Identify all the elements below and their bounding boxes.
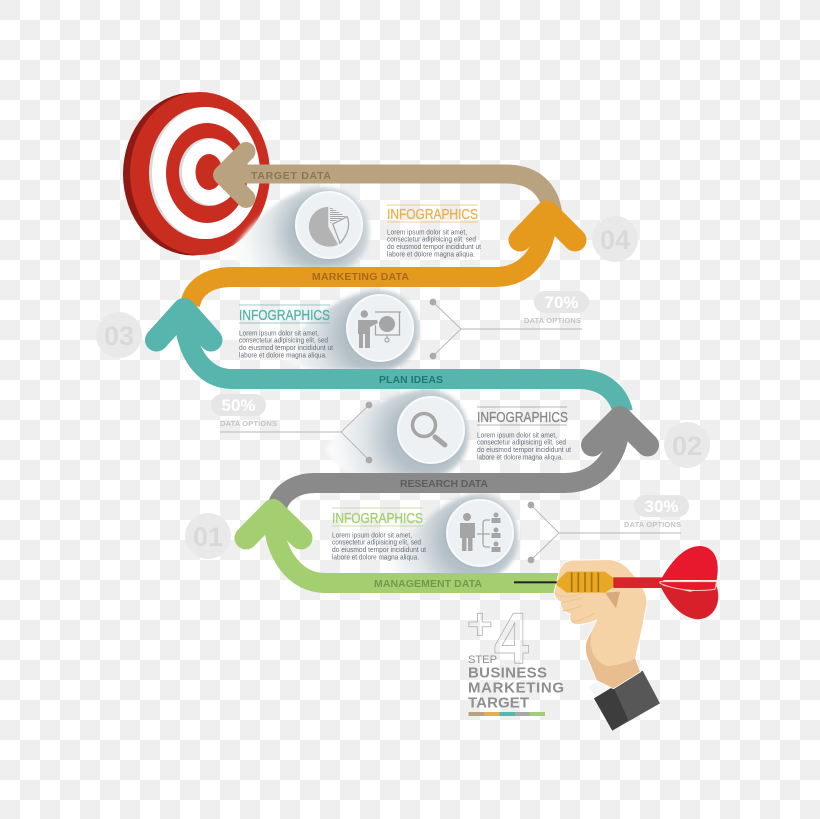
icon: pie chart <box>296 192 362 258</box>
label: marketing data: MARKETING DATA <box>312 271 409 283</box>
text block: orange infographics: consectetur adipisicing elit, sed <box>387 235 476 244</box>
label: target data: TARGET DATA <box>251 170 331 182</box>
hand <box>555 560 647 688</box>
text block: teal infographics: Lorem ipsum dolor sit amet, <box>239 328 319 338</box>
text block: gray infographics: labore et dolore magna aliqua. <box>477 452 563 462</box>
text block: teal infographics: consectetur adipisicing elit, sed <box>239 336 328 345</box>
title text: MARKETING <box>468 680 564 696</box>
shadow: magnifier circle <box>326 389 468 476</box>
plus four numeral: + <box>467 600 493 649</box>
text block: orange infographics: INFOGRAPHICS <box>387 206 478 223</box>
callout: 70 percent <box>430 291 589 359</box>
colour bar <box>468 712 545 716</box>
callout: 50 percent: 50% <box>221 396 256 415</box>
title text: TARGET <box>468 694 529 712</box>
label: plan ideas: PLAN IDEAS <box>379 374 443 386</box>
text block: orange infographics: Lorem ipsum dolor sit amet, <box>387 228 467 236</box>
step 4 tan arrow: target data <box>222 152 553 215</box>
text block: teal infographics: labore et dolore magna aliqua. <box>239 350 327 360</box>
plus four numeral: 4 <box>494 599 529 679</box>
sleeve cuff <box>588 671 660 731</box>
number badge 01: 01 <box>193 522 223 552</box>
number badge 03 <box>96 312 142 358</box>
callout: 30 percent <box>528 495 689 563</box>
callout: 70 percent: 70% <box>544 293 579 312</box>
shadow: presenter circle <box>280 290 419 370</box>
text block: green infographics: labore et dolore magna aliqua. <box>332 552 419 562</box>
icon: magnifier <box>398 397 464 463</box>
text block: gray infographics: Lorem ipsum dolor sit amet, <box>477 430 557 440</box>
title text <box>468 654 564 712</box>
dart <box>514 546 718 619</box>
text block: teal infographics: do eiusmod tempor incididunt ut <box>239 343 333 352</box>
text block: orange infographics: labore et dolore magna aliqua. <box>387 250 475 258</box>
text block: teal infographics: INFOGRAPHICS <box>239 307 330 324</box>
shadow: people circle <box>387 493 518 578</box>
shadow: pie chart circle <box>231 187 369 268</box>
callout: 50 percent <box>211 394 372 463</box>
text block: orange infographics <box>387 205 481 258</box>
number badge 04: 04 <box>600 225 630 255</box>
text block: green infographics: Lorem ipsum dolor sit amet, <box>332 530 412 540</box>
text block: teal infographics <box>239 305 333 360</box>
plus four numeral <box>467 599 529 679</box>
step 2 teal arrow: plan ideas <box>156 310 623 412</box>
callout: 70 percent: DATA OPTIONS <box>524 316 581 325</box>
target board <box>123 92 270 256</box>
step 1 gray arrow: research data <box>277 418 648 507</box>
number badge 03: 03 <box>104 321 134 351</box>
text block: gray infographics: do eiusmod tempor incididunt ut <box>477 445 571 454</box>
text block: gray infographics: consectetur adipisicing elit, sed <box>477 438 566 447</box>
icon: org chart <box>447 500 513 566</box>
text block: green infographics <box>332 508 426 562</box>
title: +4 step business marketing target <box>467 599 564 716</box>
label: management data: MANAGEMENT DATA <box>374 578 482 590</box>
number badge 04 <box>592 216 638 262</box>
text block: gray infographics: INFOGRAPHICS <box>477 409 568 426</box>
callout: 30 percent: DATA OPTIONS <box>624 520 681 529</box>
text block: gray infographics <box>477 407 571 462</box>
title text: BUSINESS <box>468 664 547 682</box>
number badge 02: 02 <box>672 431 702 461</box>
number badge 02 <box>664 422 710 468</box>
callout: 50 percent: DATA OPTIONS <box>220 419 277 428</box>
number badge 01 <box>185 513 231 559</box>
label: research data: RESEARCH DATA <box>400 478 488 490</box>
text block: green infographics: INFOGRAPHICS <box>332 510 423 527</box>
icon: presenter <box>347 295 413 361</box>
hand holding dart <box>514 546 718 731</box>
text block: green infographics: do eiusmod tempor incididunt ut <box>332 545 426 554</box>
green arrow: management data <box>246 510 560 590</box>
text block: green infographics: consectetur adipisicing elit, sed <box>332 538 421 547</box>
text block: orange infographics: do eiusmod tempor incididunt ut <box>387 242 481 251</box>
title text: STEP <box>468 654 497 666</box>
callout: 30 percent: 30% <box>644 497 679 516</box>
step 3 orange arrow: marketing data <box>190 212 575 305</box>
